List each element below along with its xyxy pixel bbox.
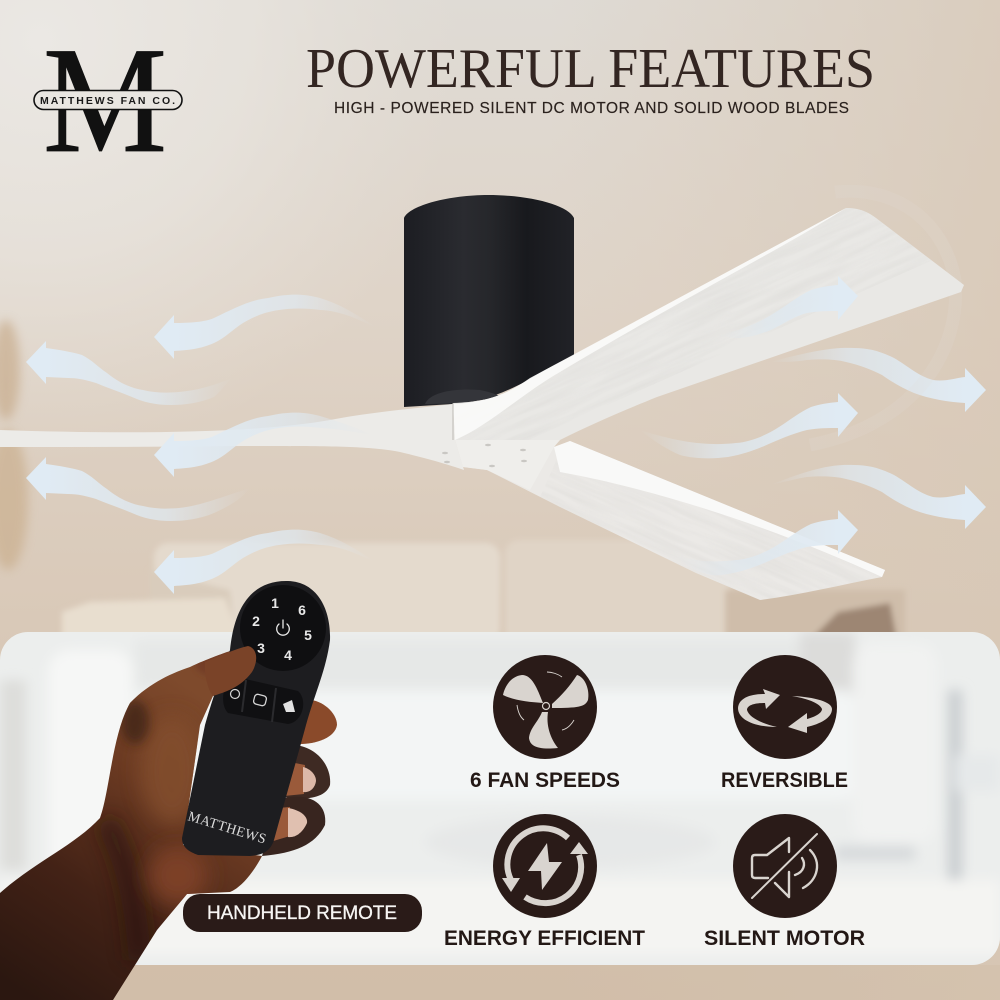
arrow: middle right (640, 393, 858, 458)
faint swirl around the blade tip (810, 191, 956, 445)
floor (0, 965, 1000, 1000)
airflow arrows over the fan (154, 276, 858, 594)
logo: Matthews Fan Co.: M (43, 16, 167, 184)
feature: 6 fan speeds (470, 655, 620, 792)
hand: arm and palm (0, 640, 270, 1000)
ceiling fan (0, 195, 964, 600)
hand: middle finger skin (284, 762, 305, 796)
airflow arrows behind the fan (26, 191, 986, 529)
arrow: upper left (154, 295, 375, 359)
remote keypad numbers: 1 (271, 595, 279, 611)
hand: ring fingernail (288, 808, 307, 837)
fan blade: upper right (452, 208, 964, 440)
feature: silent motor (704, 814, 865, 950)
remote body (182, 581, 330, 856)
fan blade: lower right (464, 441, 885, 600)
remote brand text: MATTHEWS (186, 809, 268, 848)
remote buttons row (223, 676, 303, 724)
label: silent motor: SILENT MOTOR (704, 927, 865, 950)
logo: Matthews Fan Co.: MATTHEWS FAN CO. (40, 95, 175, 107)
remote keypad numbers: 6 (298, 602, 306, 618)
icon: lightning with cycle arrows (493, 814, 597, 918)
arrow: on upper blade (720, 276, 858, 338)
remote keypad numbers (252, 595, 312, 663)
arrow: lower left (154, 530, 375, 594)
arrow: lower right (675, 510, 858, 575)
hand: thumb over remote (205, 646, 256, 696)
fan hub underside with screws (442, 440, 560, 490)
arrow: middle left (154, 413, 375, 477)
remote keypad numbers: 3 (257, 640, 265, 656)
label: reversible: REVERSIBLE (721, 769, 848, 792)
arrow: far right bottom (770, 465, 986, 529)
arrow: far right top (770, 348, 986, 412)
label: handheld remote (183, 894, 422, 932)
icon: muted speaker (733, 814, 837, 918)
hand: ring finger skin (270, 807, 290, 842)
panel: features (0, 632, 1000, 965)
fan motor housing (404, 195, 574, 407)
fan blade: left (0, 404, 464, 470)
remote keypad numbers: 2 (252, 613, 260, 629)
hand: ring finger (262, 797, 325, 856)
arrow: far left top (26, 341, 232, 405)
fan motor bottom ring (425, 390, 500, 404)
subtitle: HIGH - POWERED SILENT DC MOTOR AND SOLID WOOD BLADES (334, 100, 849, 117)
hand: index finger (295, 700, 337, 744)
remote keypad numbers: 4 (284, 647, 292, 663)
remote keypad numbers: 5 (304, 627, 312, 643)
hand: middle fingernail (303, 767, 316, 792)
title: POWERFUL FEATURES (306, 38, 875, 100)
hand: middle finger (284, 745, 330, 799)
label: energy efficient: ENERGY EFFICIENT (444, 927, 645, 950)
remote power button (277, 620, 289, 635)
remote keypad circle (240, 585, 326, 671)
hand holding remote (0, 581, 337, 1000)
label: handheld remote: HANDHELD REMOTE (207, 903, 397, 924)
feature: energy efficient (444, 814, 645, 950)
feature: reversible (721, 655, 848, 792)
icon: rotation arrows (733, 655, 837, 759)
icon: fan (493, 655, 597, 759)
label: 6 fan speeds: 6 FAN SPEEDS (470, 769, 620, 792)
arrow: far left bottom (26, 457, 250, 521)
